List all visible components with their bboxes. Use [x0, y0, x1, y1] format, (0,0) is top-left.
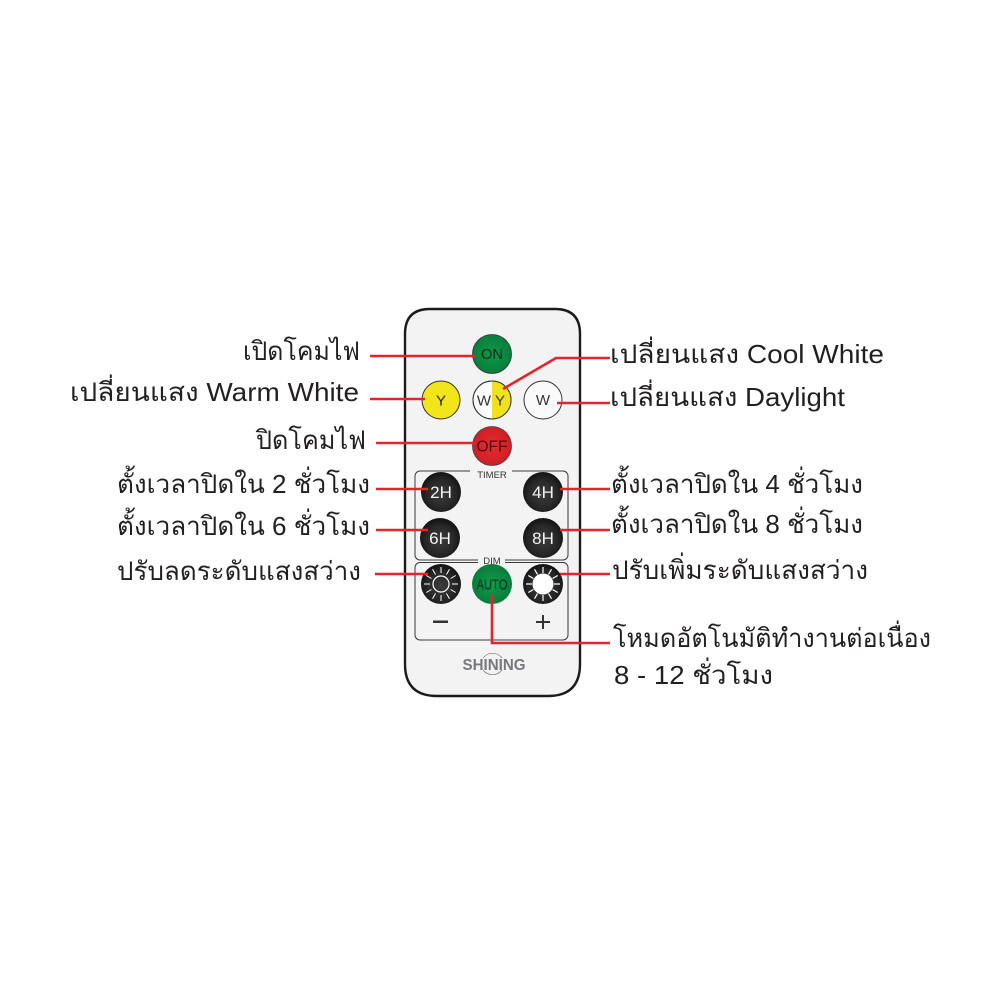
button: OFF [472, 426, 512, 466]
button: W: W [536, 392, 551, 409]
button: Y: Y [436, 392, 446, 410]
button: ON [472, 334, 512, 374]
button: AUTO [472, 564, 512, 604]
label: timer 4 hours: ตั้งเวลาปิดใน 4 ชั่วโมง [611, 465, 863, 499]
label: timer 2 hours: ตั้งเวลาปิดใน 2 ชั่วโมง [117, 465, 370, 499]
plus sign [536, 615, 550, 629]
label: turn off: ปิดโคมไฟ [255, 425, 366, 455]
button: 2H [421, 472, 461, 512]
label: cool white: เปลี่ยนแสง Cool White [610, 336, 884, 369]
label: warm white: เปลี่ยนแสง Warm White [70, 374, 359, 407]
dim label: DIM [483, 556, 501, 567]
button: WY: Y [495, 392, 505, 410]
button: 6H: 6H [429, 529, 451, 548]
label: timer 8 hours: ตั้งเวลาปิดใน 8 ชั่วโมง [611, 505, 863, 539]
button: 6H [420, 518, 460, 558]
button: ON: ON [481, 346, 503, 363]
button: dim down [421, 564, 461, 604]
button: WY [473, 381, 511, 419]
label: timer 6 hours: ตั้งเวลาปิดใน 6 ชั่วโมง [117, 507, 370, 541]
dim group frame [415, 562, 568, 640]
timer group frame [415, 471, 568, 560]
label: dim down: ปรับลดระดับแสงสว่าง [117, 556, 361, 586]
button: Y [422, 381, 460, 419]
minus sign [433, 620, 448, 623]
button: 8H [523, 518, 563, 558]
brand logo: SHINING [462, 657, 526, 674]
leader lines [370, 356, 610, 643]
button: OFF: OFF [476, 438, 508, 456]
button: 4H: 4H [532, 483, 554, 502]
button: W [524, 381, 562, 419]
button: 2H: 2H [430, 483, 452, 502]
button: 4H [523, 472, 563, 512]
label: auto mode [613, 620, 931, 690]
label: daylight: เปลี่ยนแสง Daylight [610, 379, 846, 412]
button: AUTO: AUTO [476, 576, 508, 594]
label: auto mode: โหมดอัตโนมัติทำงานต่อเนื่อง [613, 620, 931, 653]
label: auto mode: 8 - 12 ชั่วโมง [614, 657, 773, 690]
button: 8H: 8H [532, 529, 554, 548]
button: WY: W [477, 392, 492, 410]
label: turn on: เปิดโคมไฟ [243, 336, 360, 366]
label: dim up: ปรับเพิ่มระดับแสงสว่าง [612, 552, 868, 585]
remote control body [405, 309, 580, 696]
timer label: TIMER [477, 470, 507, 481]
button: dim up [523, 564, 563, 604]
